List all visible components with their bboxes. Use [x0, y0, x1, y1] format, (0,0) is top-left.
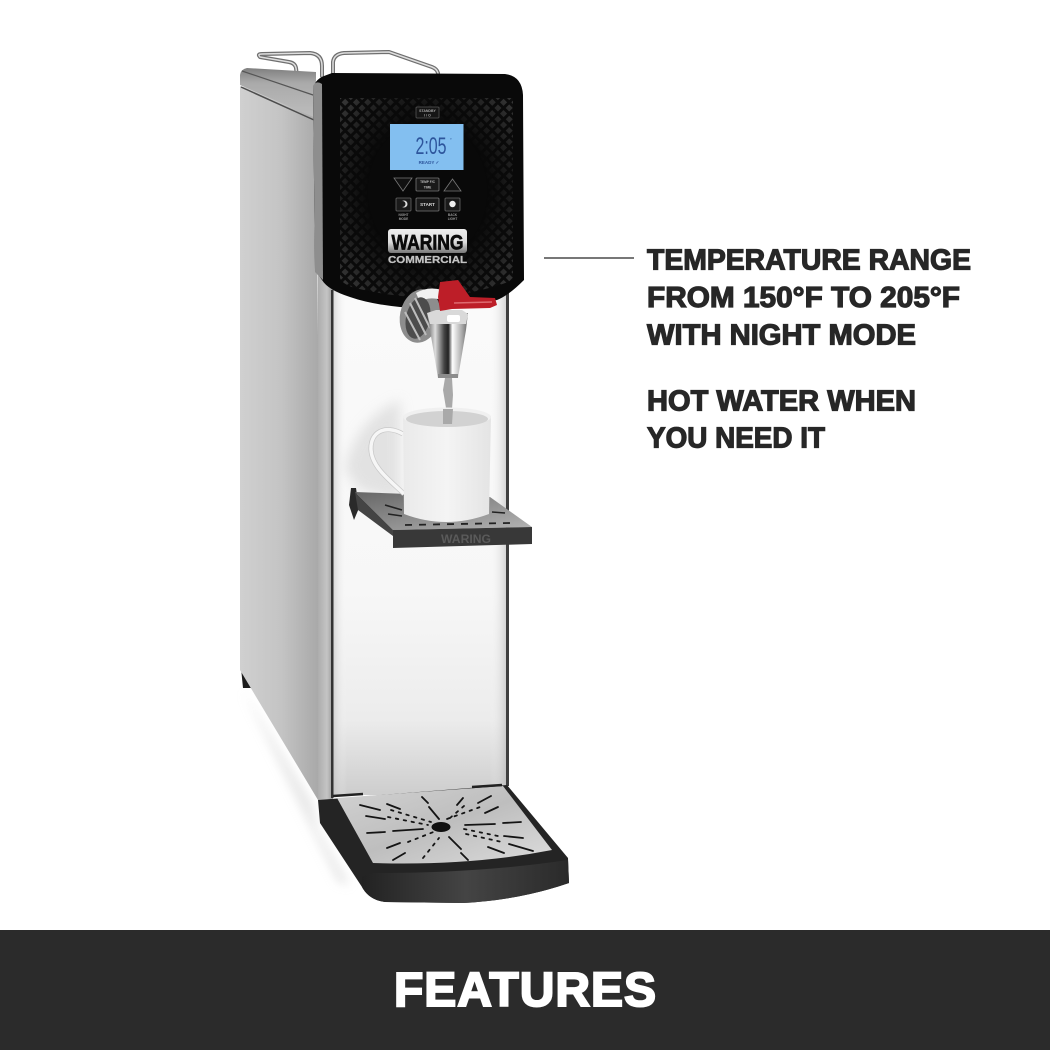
- brand logo: [388, 229, 468, 266]
- text block: hot water: YOU NEED IT: [647, 422, 825, 454]
- control buttons: [394, 178, 461, 221]
- standby button: STANDBY: [419, 109, 436, 113]
- textured panel: [340, 98, 513, 298]
- control buttons: LIGHT: [448, 217, 457, 221]
- control buttons: TEMP F/C: [420, 180, 436, 184]
- rear foot: [241, 668, 252, 688]
- control buttons: START: [420, 202, 435, 207]
- red faucet handle: [438, 280, 497, 311]
- shelf: WARING: [441, 532, 491, 546]
- water stream: [443, 378, 453, 423]
- front trim strip: [318, 270, 333, 800]
- control buttons: BACK: [448, 213, 458, 217]
- text block: temperature range: TEMPERATURE RANGE: [647, 244, 971, 276]
- LCD display: READY ✓: [419, 160, 440, 165]
- text block: temperature range: WITH NIGHT MODE: [647, 320, 916, 352]
- footer heading: FEATURES: [394, 964, 656, 1017]
- brand logo: WARING: [392, 232, 464, 254]
- LCD display: 2:05: [416, 133, 446, 160]
- mug: [371, 408, 491, 522]
- faucet: [395, 285, 468, 378]
- text block: temperature range: FROM 150°F TO 205°F: [647, 282, 960, 314]
- text block: hot water: [647, 386, 916, 454]
- standby button: [416, 107, 439, 118]
- text block: hot water: HOT WATER WHEN: [647, 386, 916, 418]
- front panel: [333, 290, 507, 795]
- control buttons: TIME: [424, 186, 431, 190]
- wall shadow behind mug: [345, 400, 400, 500]
- product: hot water dispenser: [240, 52, 569, 903]
- top face: [240, 68, 316, 118]
- standby button: I / O: [424, 114, 431, 118]
- footer band: [0, 930, 1050, 1050]
- control head: [313, 73, 524, 308]
- LCD display: °: [450, 137, 452, 142]
- brand logo: COMMERCIAL: [388, 254, 468, 266]
- shelf: [349, 488, 532, 548]
- carry handles: [259, 52, 438, 84]
- text block: temperature range: [647, 244, 971, 352]
- callout leader line: [544, 257, 634, 259]
- tray slots: [360, 796, 533, 860]
- control buttons: NIGHT: [399, 213, 409, 217]
- control buttons: MODE: [399, 217, 408, 221]
- cast shadow: [243, 690, 350, 885]
- side panel: [240, 86, 322, 800]
- drip tray: [318, 785, 569, 903]
- LCD display: [390, 124, 464, 170]
